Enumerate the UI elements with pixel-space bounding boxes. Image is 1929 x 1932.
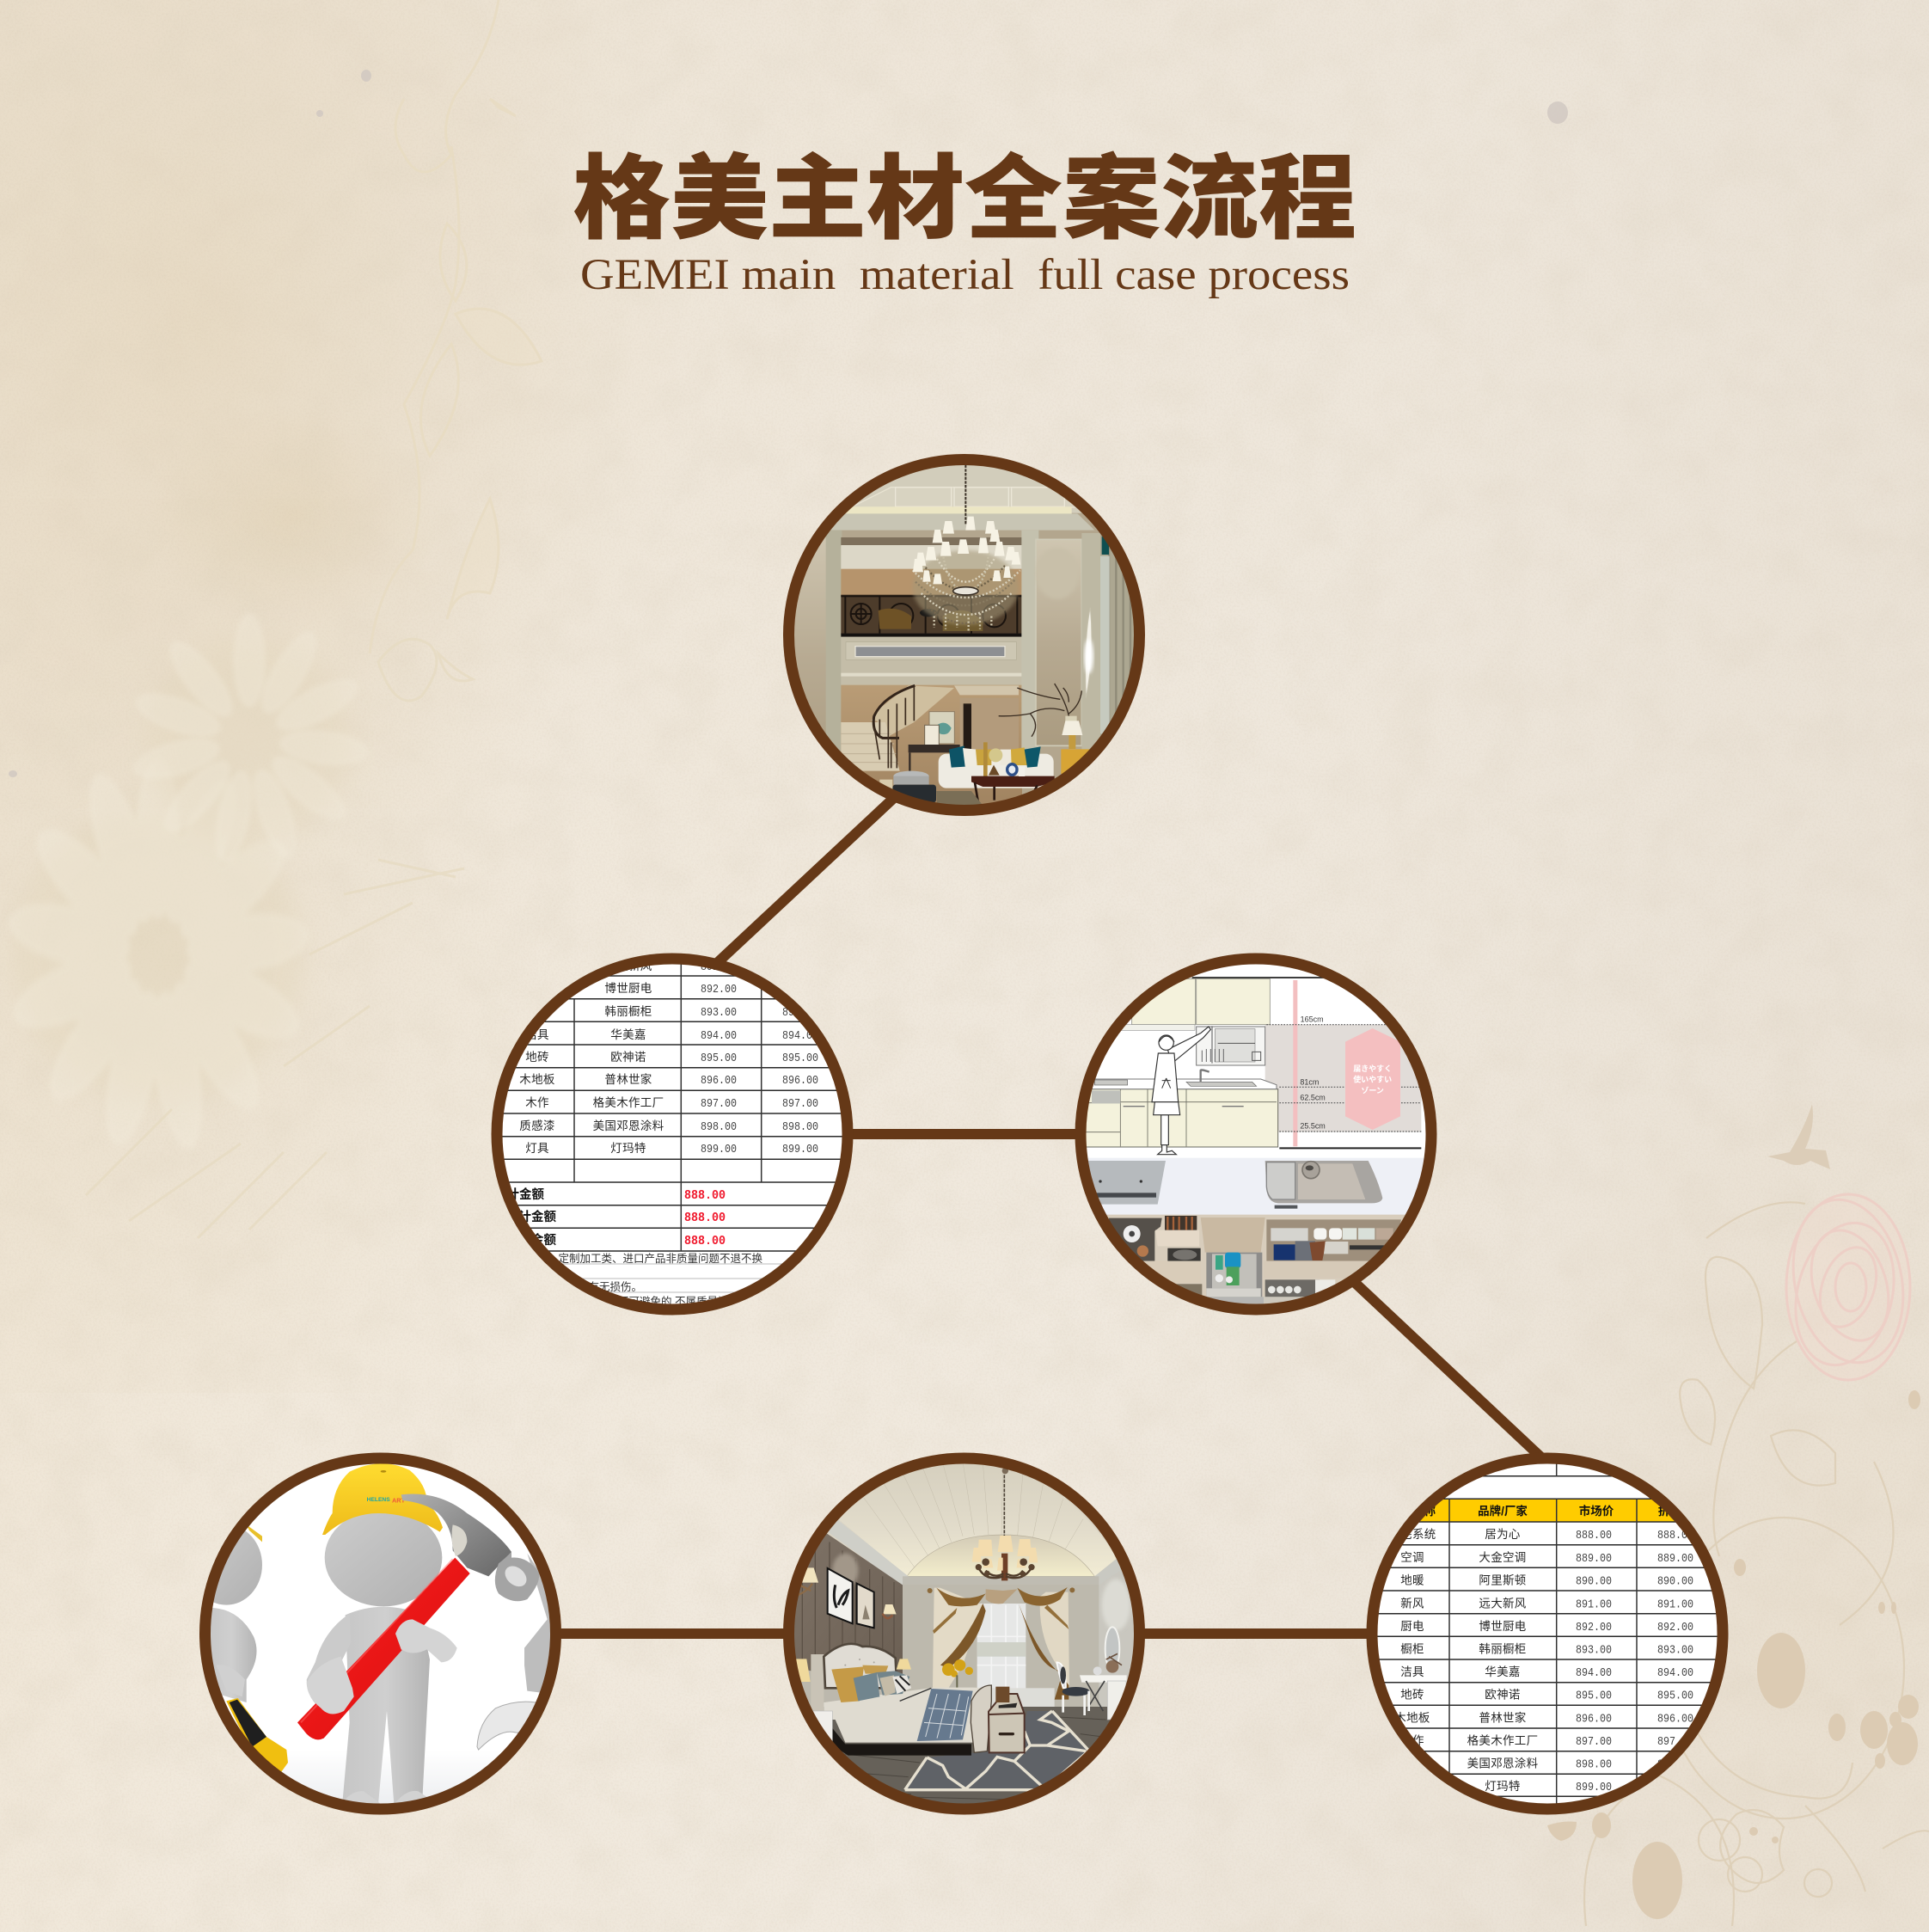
- step 4 circle: budget table with yellow header: 市场价: [1579, 1504, 1614, 1518]
- step 6 circle: 3D workers with hammer: ART: [392, 1496, 406, 1504]
- step 4 circle: budget table with yellow header: 890.00: [1576, 1576, 1612, 1589]
- step 2 circle: quotation table: 整有无损伤。: [578, 1280, 642, 1293]
- step 4 circle: budget table with yellow header: 894.00: [1576, 1667, 1612, 1680]
- kitchen counter photo: [1081, 1158, 1436, 1221]
- step 2 circle: quotation table: 博世厨电: [604, 981, 652, 995]
- railing: [841, 595, 1022, 635]
- step 2 circle: quotation table: 洁具: [525, 1028, 549, 1041]
- step 2 circle: quotation table: 888.00: [684, 1211, 726, 1225]
- step 2 circle: quotation table: 美国邓恩涂料: [593, 1119, 664, 1132]
- height labels: [1300, 1015, 1326, 1131]
- watermark: bird: [1767, 1104, 1830, 1169]
- throw: [917, 1689, 973, 1741]
- watermark: left flowers: [4, 613, 473, 1238]
- arch: [907, 1535, 1094, 1576]
- subheading: English title: GEMEI main material full case process: [580, 251, 1350, 299]
- step 2 circle: quotation table: 899.00: [701, 1144, 737, 1156]
- ceiling: [788, 1459, 1143, 1585]
- curtains: [933, 1588, 983, 1688]
- step 4 circle: budget table with yellow header: 欧神诺: [1485, 1689, 1521, 1702]
- ring: [789, 1458, 1140, 1809]
- step 2 circle: quotation table: 891.00: [701, 961, 737, 974]
- step 2 circle: quotation table: 木地板: [519, 1073, 555, 1086]
- step 4 circle: budget table with yellow header: 893.00: [1576, 1644, 1612, 1657]
- step 2 circle: quotation table: 合计金额: [506, 1232, 556, 1248]
- ring: [497, 959, 848, 1309]
- step 2 circle: quotation table: 灯具: [525, 1142, 549, 1155]
- step 2 circle: quotation table: 895.00: [782, 1052, 818, 1065]
- header band: [1367, 1499, 1728, 1522]
- step 4 circle: budget table with yellow header: 898.00: [1657, 1758, 1693, 1771]
- step 4 circle: budget table with yellow header: 891.00: [1657, 1598, 1693, 1611]
- paper specks: [9, 70, 1568, 777]
- step 3 circle: kitchen ergonomics diagram: 届きやすく: [1353, 1064, 1392, 1073]
- step 2 circle: quotation table: 899.00: [782, 1144, 818, 1156]
- step 4 circle: budget table with yellow header: 美国邓恩涂料: [1467, 1757, 1539, 1769]
- upper cabinets: [1132, 978, 1196, 1025]
- left wall: [794, 537, 826, 643]
- step 4 circle: budget table with yellow header: 普林世家: [1479, 1710, 1527, 1724]
- ottoman and floor: [893, 771, 929, 782]
- step 2 circle: quotation table: 897.00: [701, 1098, 737, 1111]
- watermark: rose: [1779, 1189, 1918, 1380]
- step 4 circle: budget table with yellow header: 888.00: [1657, 1530, 1693, 1543]
- stair picture and console: [929, 712, 954, 744]
- step 2 circle: quotation table: 894.00: [701, 1030, 737, 1043]
- step 2 circle: quotation table: 896.00: [782, 1075, 818, 1088]
- person figure: [1152, 1027, 1210, 1155]
- window and sheer: [977, 1604, 1026, 1690]
- middle drawer: [1201, 1217, 1265, 1253]
- step 2 circle: quotation table: 普林世家: [604, 1072, 652, 1086]
- step 2 circle: quotation table: 少补。定制加工类、进口产品非质量问题不退不换: [526, 1252, 762, 1265]
- beam with vent: [841, 637, 1022, 685]
- step 4 circle: budget table with yellow header: 891.00: [1576, 1598, 1612, 1611]
- ceiling: [856, 465, 1082, 513]
- step 4 circle: budget table with yellow header: 居为心: [1485, 1528, 1521, 1541]
- pillows: [831, 1666, 864, 1702]
- dish rack: [1197, 1027, 1265, 1065]
- step 4 circle: budget table with yellow header: 894.00: [1657, 1667, 1693, 1680]
- lower room: [841, 685, 1022, 808]
- step 2 circle: quotation table: 895.00: [701, 1052, 737, 1065]
- right wall: [1021, 531, 1038, 782]
- height labels: 165cm: [1301, 1015, 1324, 1023]
- step 2 circle: quotation table: 质感漆: [519, 1119, 555, 1132]
- step 4 circle: budget table with yellow header: 全宅系统: [1388, 1527, 1436, 1541]
- watermark: lower-right ornament: [1584, 1202, 1929, 1926]
- wall sconce: [1086, 608, 1092, 698]
- step 4 circle: budget table with yellow header: 新风: [1400, 1597, 1424, 1610]
- table grid: [490, 976, 855, 1251]
- step 4 circle: budget table with yellow header: 890.00: [1657, 1576, 1693, 1589]
- ring: [1081, 959, 1431, 1309]
- step 4 circle: budget table with yellow header: 木地板: [1394, 1711, 1430, 1724]
- step 4 circle: budget table with yellow header: 897.00: [1576, 1736, 1612, 1749]
- step 2 circle: quotation table: [490, 950, 855, 1320]
- wall pictures: [828, 1568, 853, 1623]
- drawers: [1081, 1215, 1436, 1309]
- table lamp: [1065, 716, 1077, 723]
- step 4 circle: budget table with yellow header: 888.00: [1576, 1530, 1612, 1543]
- step 2 circle: quotation table: 896.00: [701, 1075, 737, 1088]
- step 2 circle: quotation table: 888.00: [684, 1189, 726, 1203]
- step 2 circle: quotation table: 888.00: [684, 1235, 726, 1248]
- step 6 circle: 3D workers with hammer: HELENS: [367, 1497, 390, 1503]
- step 4 circle: budget table with yellow header: 地砖: [1400, 1689, 1424, 1702]
- step 4 circle: budget table with yellow header: 895.00: [1657, 1690, 1693, 1703]
- dotted height lines: [1266, 1025, 1421, 1132]
- bench trunk: [989, 1694, 1025, 1752]
- chandelier: [1002, 1470, 1007, 1536]
- right drawers: [1266, 1219, 1401, 1261]
- step 4 circle: budget table with yellow header: 折扣价: [1658, 1504, 1693, 1518]
- hammer: [401, 1494, 511, 1576]
- step 2 circle: quotation table: 894.00: [782, 1030, 818, 1043]
- step 5 circle: bedroom render: [788, 1458, 1143, 1812]
- step 4 circle: budget table with yellow header: 格美木作工厂: [1467, 1734, 1538, 1747]
- dressing table and mirror: [1105, 1627, 1119, 1670]
- left nightstand and lamp: [795, 1659, 811, 1682]
- step 4 circle: budget table with yellow header: 889.00: [1576, 1553, 1612, 1566]
- step 2 circle: quotation table: 893.00: [782, 1007, 818, 1020]
- step 4 circle: budget table with yellow header: 896.00: [1657, 1713, 1693, 1726]
- chandelier chain: [963, 465, 968, 524]
- step 4 circle: budget table with yellow header: 厨电: [1400, 1620, 1424, 1633]
- step 4 circle: budget table with yellow header: 华美嘉: [1485, 1665, 1521, 1678]
- head: [325, 1509, 442, 1606]
- step 3 circle: kitchen ergonomics diagram: 使いやすい: [1353, 1075, 1392, 1084]
- table grid: [1367, 1476, 1728, 1796]
- step 6 circle: 3D workers with hammer: [191, 1458, 559, 1814]
- step 4 circle: budget table with yellow header: 897.00: [1657, 1736, 1693, 1749]
- heading: Chinese title: 格美主材全案流程: [573, 147, 1356, 250]
- step 2 circle: quotation table: 灯玛特: [610, 1142, 646, 1155]
- grey reach zone: [1265, 1025, 1421, 1132]
- step 2 circle: quotation table: 橱柜: [525, 1005, 549, 1018]
- ring: [789, 459, 1140, 810]
- pink height bar: [1293, 980, 1297, 1146]
- hard hat: [322, 1463, 443, 1535]
- upper opening: [841, 537, 1022, 546]
- step 2 circle: quotation table: 地砖: [525, 1051, 549, 1064]
- step 4 circle: budget table with yellow header: 品牌/厂家: [1478, 1504, 1528, 1518]
- watermark: top-left vine and leaves: [370, 0, 542, 653]
- lower cabinets: [1081, 1089, 1278, 1147]
- step 4 circle: budget table with yellow header: 韩丽橱柜: [1479, 1642, 1527, 1655]
- counter: [1081, 1079, 1277, 1089]
- step 4 circle: budget table with yellow header: 大金空调: [1479, 1551, 1527, 1564]
- ring: [1372, 1458, 1723, 1809]
- step 2 circle: quotation table: 木作: [525, 1096, 549, 1109]
- step 4 circle: budget table with yellow header: 博世厨电: [1479, 1619, 1527, 1633]
- floor: [788, 1707, 1143, 1812]
- lampshades: [913, 517, 1020, 584]
- step 4 circle: budget table with yellow header: [1367, 1453, 1728, 1814]
- step 1 circle: living room with chandelier: [788, 458, 1143, 814]
- sofa: [939, 754, 1054, 788]
- back wall: [903, 1585, 1100, 1708]
- step 4 circle: budget table with yellow header: 橱柜: [1400, 1642, 1424, 1655]
- step 4 circle: budget table with yellow header: 892.00: [1657, 1622, 1693, 1635]
- main figure left arm: [307, 1614, 352, 1717]
- step 4 circle: budget table with yellow header: 地暖: [1400, 1574, 1424, 1587]
- pink zone hexagon: [1345, 1028, 1400, 1130]
- main figure body: [342, 1607, 430, 1804]
- step 4 circle: budget table with yellow header: 灯玛特: [1485, 1780, 1521, 1793]
- step 3 circle: kitchen ergonomics diagram: [1081, 959, 1436, 1316]
- step 3 circle: kitchen ergonomics diagram: ゾーン: [1361, 1086, 1384, 1095]
- step 4 circle: budget table with yellow header: 896.00: [1576, 1713, 1612, 1726]
- right figure: [477, 1554, 550, 1750]
- step 2 circle: quotation table: 898.00: [701, 1121, 737, 1134]
- step 2 circle: quotation table: 897.00: [782, 1098, 818, 1111]
- step 4 circle: budget table with yellow header: 895.00: [1576, 1690, 1612, 1703]
- step 4 circle: budget table with yellow header: 893.00: [1657, 1644, 1693, 1657]
- step 2 circle: quotation table: 格美木作工厂: [593, 1096, 664, 1109]
- hands: [307, 1657, 354, 1714]
- left figure: [191, 1524, 288, 1773]
- branches: [999, 684, 1081, 737]
- cornices: [824, 1519, 909, 1586]
- coffee table: [971, 776, 1055, 787]
- step 4 circle: budget table with yellow header: 889.00: [1657, 1553, 1693, 1566]
- step 2 circle: quotation table: 合计金额: [506, 1209, 556, 1224]
- step 4 circle: budget table with yellow header: 空调: [1400, 1551, 1424, 1564]
- height labels: 81cm: [1300, 1078, 1319, 1087]
- bed: [811, 1654, 824, 1711]
- right wall: [1099, 1559, 1137, 1726]
- step 4 circle: budget table with yellow header: 898.00: [1576, 1758, 1612, 1771]
- top line and base line: [1192, 975, 1335, 979]
- flowers on the bedside: [942, 1659, 973, 1677]
- step 2 circle: quotation table: 韩丽橱柜: [604, 1005, 652, 1018]
- dressing chair: [1056, 1662, 1066, 1688]
- step 2 circle: quotation table: 合计金额: [494, 1187, 544, 1202]
- step 4 circle: budget table with yellow header: 项目名称: [1389, 1504, 1436, 1518]
- step 4 circle: budget table with yellow header: 阿里斯顿: [1479, 1574, 1527, 1587]
- bed base: [832, 1728, 971, 1756]
- yellow tool: [226, 1698, 288, 1773]
- step 4 circle: budget table with yellow header: 远大新风: [1479, 1597, 1527, 1610]
- step 2 circle: quotation table: 华美嘉: [610, 1028, 646, 1041]
- height labels: 25.5cm: [1300, 1122, 1326, 1131]
- step 2 circle: quotation table: 898.00: [782, 1121, 818, 1134]
- step 2 circle: quotation table: 远大新风: [604, 960, 652, 972]
- step 4 circle: budget table with yellow header: 899.00: [1576, 1782, 1612, 1794]
- step 2 circle: quotation table: 不可避免的,不属质量问题: [618, 1295, 739, 1308]
- step 4 circle: budget table with yellow header: 892.00: [1576, 1622, 1612, 1635]
- step 2 circle: quotation table: 893.00: [701, 1007, 737, 1020]
- step 4 circle: budget table with yellow header: 木作: [1400, 1734, 1424, 1747]
- step 2 circle: quotation table: 892.00: [701, 984, 737, 997]
- rug: [905, 1711, 1089, 1790]
- title: [573, 147, 1356, 299]
- wall sconces: [801, 1567, 818, 1583]
- step 4 circle: budget table with yellow header: 洁具: [1400, 1665, 1424, 1678]
- step 2 circle: quotation table: 欧神诺: [610, 1051, 646, 1064]
- height labels: 62.5cm: [1300, 1094, 1326, 1102]
- crystals: [913, 550, 1019, 625]
- ring: [205, 1458, 555, 1809]
- connector lines: [557, 796, 1543, 1634]
- left wood wall: [788, 1533, 903, 1694]
